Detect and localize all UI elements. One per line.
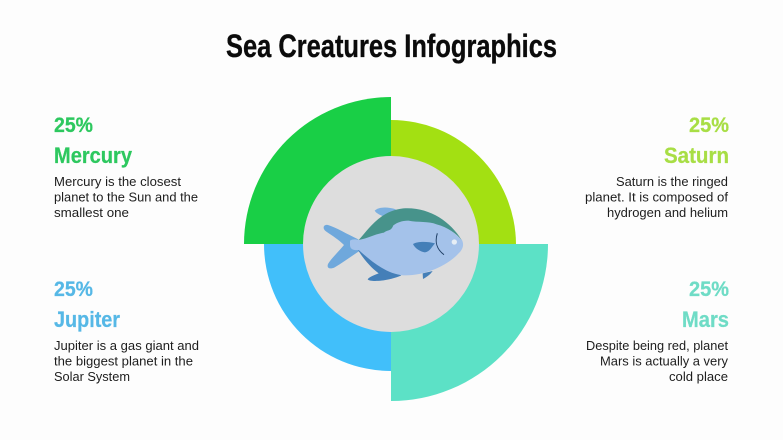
percentage: 25% — [689, 278, 729, 301]
fish lower fin — [357, 249, 401, 281]
panel: Mars — [586, 278, 729, 384]
fish body — [350, 220, 463, 275]
description: Saturn is the ringed — [616, 175, 728, 189]
panel: Jupiter — [54, 278, 199, 384]
description: planet. It is composed of — [585, 190, 729, 204]
description — [54, 339, 199, 384]
fish eye — [452, 239, 457, 245]
segment: Saturn — [391, 120, 516, 244]
heading: Jupiter — [54, 307, 120, 332]
icon: fish — [324, 207, 463, 281]
description: hydrogen and helium — [607, 206, 728, 220]
percentage: 25% — [54, 278, 93, 301]
panel: Saturn — [585, 114, 729, 220]
percentage: 25% — [54, 114, 93, 137]
description — [54, 175, 198, 220]
description — [586, 339, 729, 384]
chart: radial quarter segments — [244, 97, 548, 401]
title: Sea Creatures Infographics — [226, 28, 557, 64]
fish tail — [324, 225, 360, 268]
description: Despite being red, planet — [586, 339, 729, 353]
heading: Mars — [682, 307, 729, 332]
percentage: 25% — [689, 114, 729, 137]
segment: Jupiter — [264, 244, 391, 371]
heading: Mercury — [54, 143, 133, 168]
description: cold place — [669, 370, 728, 384]
description — [585, 175, 729, 220]
panel: Mercury — [54, 114, 198, 220]
description: Solar System — [54, 370, 130, 384]
fish gill — [436, 233, 444, 255]
fish small bottom fin — [423, 271, 433, 279]
description: Jupiter is a gas giant and — [54, 339, 199, 353]
segment: Mars — [391, 244, 548, 401]
fish back — [359, 208, 462, 240]
fish pectoral fin — [413, 242, 435, 252]
segment: Mercury — [244, 97, 391, 244]
description: Mercury is the closest — [54, 175, 182, 189]
description: Mars is actually a very — [600, 354, 729, 368]
description: smallest one — [54, 206, 129, 220]
heading: Saturn — [664, 143, 729, 168]
description: planet to the Sun and the — [54, 190, 198, 204]
fish dorsal fin — [375, 207, 396, 217]
description: the biggest planet in the — [54, 354, 193, 368]
center circle — [303, 156, 479, 332]
